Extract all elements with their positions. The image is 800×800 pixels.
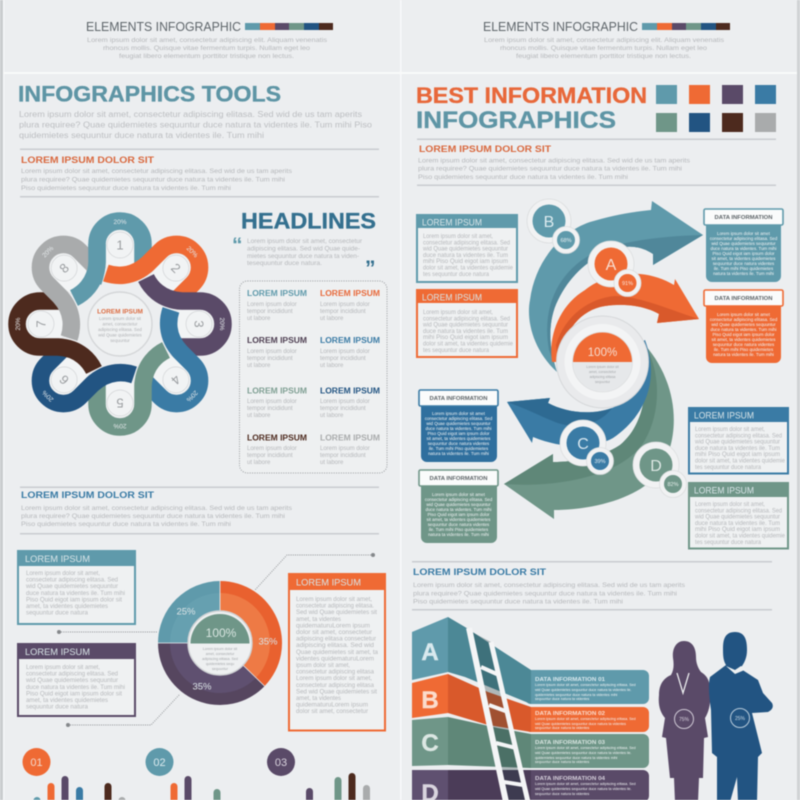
dotted list panel: LOREM IPSUM xyxy=(247,386,307,396)
flower centre text: amet, consectetur xyxy=(103,322,138,326)
flower chart: 20% xyxy=(185,389,199,403)
data card: teal: DATA INFORMATION xyxy=(714,215,773,221)
block D: sequuntur duce natura ta videntes xyxy=(535,792,590,796)
dotted list panel: LOREM IPSUM xyxy=(247,434,307,442)
marker B: B xyxy=(544,214,554,231)
donut chart: sequuntur xyxy=(212,667,229,671)
panel: blue box right: LOREM IPSUM xyxy=(694,410,754,420)
quote block: ” xyxy=(365,257,376,280)
panel: orange lorem ipsum xyxy=(288,573,386,730)
panel: orange lorem ipsum: quidematuruLorem ipsum xyxy=(296,623,370,629)
quote block: tesequuntur duce natura. xyxy=(247,261,322,267)
panel: orange lorem ipsum: Lorem ipsum dolor sit amet, xyxy=(296,676,372,682)
sub paragraph right xyxy=(418,158,690,181)
header right xyxy=(483,20,730,60)
data card: blue: ile. Tum mihi Piso quidemietes xyxy=(429,446,489,451)
flower chart: 4 xyxy=(168,372,184,388)
block C xyxy=(412,717,649,768)
arrow: orange A xyxy=(551,274,699,362)
dotted list panel: LOREM IPSUM xyxy=(320,386,380,396)
flower chart: 20% xyxy=(113,219,127,226)
panel: green box right: consectetur adipiscing elitasa. Sed xyxy=(695,508,782,514)
block D: wid Quae quidemietes sequuntur duce natura ta videntes ile. xyxy=(535,787,632,791)
sub paragraph right: Lorem ipsum dolor sit amet, consectetur adipiscing elitasa. Sed wid de us tam aperits xyxy=(418,158,690,164)
sub paragraph right: plura requiree? Quae quidemietes sequuntur duce natura ta videntes ile. Tum mihi xyxy=(418,166,682,172)
header text: rhoncus mollis. Quisque vitae fermentum turpis. Nullam eget leo xyxy=(103,46,311,52)
dotted list panel: LOREM IPSUM xyxy=(247,336,307,345)
block A: sequuntur duce natura ta videntes xyxy=(535,697,590,701)
donut chart: 25% xyxy=(176,606,196,618)
header text: Lorem ipsum dolor sit amet, consectetur adipiscing elit. Aliquam venenatis xyxy=(484,38,724,44)
data card: teal: duce natura ta videntes. Tum mihi xyxy=(711,246,776,251)
centre circle 100%: Lorem ipsum dolor sit xyxy=(586,365,619,369)
data card: teal: sit amet, ta videntes quidemietes xyxy=(712,256,776,261)
flower centre text: wid Quae quidemietes xyxy=(98,332,143,338)
flower chart: 8 xyxy=(56,260,72,276)
panel: orange lorem ipsum: consectetur adipiscing elitasa xyxy=(296,670,375,676)
block C: DATA INFORMATION 03 xyxy=(535,740,605,746)
data card: green xyxy=(419,470,498,543)
bar chart 02 xyxy=(146,748,220,800)
centre circle 100%: 100% xyxy=(588,347,617,359)
panel: orange box right column: LOREM IPSUM xyxy=(422,292,482,302)
dotted list panel: tempor incididunt xyxy=(247,406,293,412)
panel: orange lorem ipsum: consectetur adipiscing elitasa. xyxy=(296,604,374,610)
panel: orange lorem ipsum: dolor sit amet, consectetur xyxy=(296,630,372,636)
flower chart: 20% xyxy=(41,389,55,403)
header text: Lorem ipsum dolor sit amet, consectetur adipiscing elit. Aliquam venenatis xyxy=(87,38,327,44)
heading: headlines: HEADLINES xyxy=(241,208,376,234)
data card: teal: Piso Quid eigot iam ipsum dolor xyxy=(712,251,775,256)
quote block: mietes sequuntur duce natura ta viden- xyxy=(247,254,359,260)
panel: purple lorem ipsum: amet, ta videntes quidemietes xyxy=(26,698,108,704)
heading: infographics: INFOGRAPHICS xyxy=(416,107,616,134)
flower centre text xyxy=(88,292,152,356)
block A xyxy=(412,617,649,704)
sub paragraph: plura requiree? Quae quidemietes sequuntur duce natura ta videntes ile. Tum mihi xyxy=(21,178,285,184)
donut chart: 100% xyxy=(206,626,237,640)
marker B xyxy=(527,199,580,254)
dotted list panel: tempor incididunt xyxy=(247,453,293,459)
flower chart: 6 xyxy=(56,372,72,388)
block A: wid Quae quidemietes sequuntur duce natura ta videntes ile. xyxy=(535,688,632,692)
data card: green: Lorem ipsum dolor sit amet xyxy=(432,492,486,497)
dotted list panel: ut labore xyxy=(320,413,344,419)
sub paragraph right: Piso quidemietes sequuntur duce natura ta videntes ile. Tum mihi xyxy=(418,175,628,181)
donut chart: 35% xyxy=(258,636,278,648)
panel: orange lorem ipsum: Quae quidemietes sit amet, ta xyxy=(296,650,379,656)
panel: orange lorem ipsum: dolor sit amet, consectetur xyxy=(296,709,368,715)
panel: purple lorem ipsum: wid Quae quidemietes sequuntur xyxy=(25,678,118,684)
dotted list panel: Lorem ipsum dolor xyxy=(247,399,297,405)
dotted list panel: ut labore xyxy=(320,460,344,466)
panel: green box right xyxy=(688,482,789,548)
block D xyxy=(412,770,649,800)
panel: green box right: dolor sit amet, ta videntes quidemie xyxy=(695,534,786,540)
data card: teal: Lorem ipsum dolor sit amet xyxy=(717,231,771,236)
dotted list panel: Lorem ipsum dolor xyxy=(247,349,297,355)
dotted list panel: Lorem ipsum dolor xyxy=(320,302,370,308)
panel: teal box right column: consectetur adipiscing elitasa. Sed xyxy=(423,240,510,246)
panel: orange lorem ipsum: ipsum dolor sit amet, xyxy=(296,663,350,669)
panel: purple lorem ipsum: LOREM IPSUM xyxy=(25,647,90,657)
intro paragraph left: quidemietes sequuntur duce natura ta videntes ile. Tum mihi xyxy=(19,131,264,140)
block D: DATA INFORMATION 04 xyxy=(535,776,606,782)
panel: orange box right column: duce natura ta videntes ile. Tum xyxy=(423,329,508,335)
panel: orange lorem ipsum: amet, ta videntes xyxy=(296,617,341,623)
data card: orange: Lorem ipsum dolor sit amet xyxy=(717,312,771,317)
panel: orange lorem ipsum: Sed wid Quae quidemietes sit xyxy=(296,610,377,616)
data card: teal: natura ta videntes ile. Tum mihi xyxy=(713,271,774,276)
flower chart: 3 xyxy=(192,320,206,328)
silhouette: woman xyxy=(659,641,710,800)
panel: teal lorem ipsum: Lorem ipsum dolor sit amet, xyxy=(26,571,100,577)
centre circle 100% xyxy=(556,316,648,408)
centre circle 100%: sequuntur xyxy=(595,380,611,384)
block D: Lorem ipsum dolor sit amet, consectetur adipiscing elitasa. Sed xyxy=(535,782,636,786)
panel: teal lorem ipsum: sequuntur duce natura xyxy=(26,611,89,617)
data card: green: ile. Tum mihi Piso quidemietes xyxy=(429,527,489,532)
colour bar xyxy=(245,23,333,30)
silhouette: man: 25% xyxy=(735,716,746,722)
sub paragraph xyxy=(21,169,292,192)
data card: orange xyxy=(704,290,783,363)
data card: green: natura ta videntes ile. Tum mihi xyxy=(428,532,489,537)
data card: orange: natura ta videntes ile. Tum mihi xyxy=(713,352,774,357)
donut chart: Lorem ipsum dolor sit xyxy=(203,647,237,651)
panel: purple lorem ipsum: sequuntur duce natura xyxy=(26,705,89,711)
quote block xyxy=(232,234,376,280)
data card: blue: consectetur adipiscing elitasa. Sed xyxy=(425,416,493,421)
panel: blue box right: consectetur adipiscing elitasa. Sed xyxy=(695,433,782,439)
block B: DATA INFORMATION 02 xyxy=(535,711,605,717)
dotted list panel: ut labore xyxy=(247,316,271,322)
sub paragraph blue right xyxy=(413,583,685,606)
heading: best information: BEST INFORMATION xyxy=(416,83,647,108)
block B: sequuntur duce natura ta videntes xyxy=(535,726,590,730)
panel: blue box right: Lorem ipsum dolor sit amet, xyxy=(695,427,765,433)
panel: teal box right column xyxy=(416,214,518,282)
sub paragraph: Piso quidemietes sequuntur duce natura ta videntes ile. Tum mihi xyxy=(21,186,231,192)
data card: teal xyxy=(704,209,783,282)
panel: green box right: duce natura ta videntes ile. Tum xyxy=(695,521,780,527)
data card: blue: duce natura ta videntes. Tum mihi xyxy=(426,426,491,431)
panel: teal box right column: Lorem ipsum dolor sit amet, xyxy=(423,234,493,240)
panel: orange lorem ipsum: consectetur adipiscing elitasa xyxy=(296,683,375,689)
colour bar xyxy=(642,23,730,30)
data card: green: consectetur adipiscing elitasa. Sed xyxy=(425,497,493,502)
marker C: C xyxy=(577,436,589,453)
block B: Lorem ipsum dolor sit amet, consectetur adipiscing elitasa. Sed xyxy=(535,717,636,721)
data card: orange: duce natura ta videntes. Tum mihi xyxy=(711,327,776,332)
panel: teal lorem ipsum: LOREM IPSUM xyxy=(25,554,90,564)
data card: orange: sequuntur duce natura videntes xyxy=(713,342,775,347)
marker D: 82% xyxy=(667,482,679,488)
panel: teal lorem ipsum: wid Quae quidemietes sequuntur xyxy=(25,584,118,590)
flower chart: 20% xyxy=(218,317,225,331)
block C: quidemietes sequuntur duce natura ta videntes mihi xyxy=(535,756,618,760)
dotted list panel: tempor incididunt xyxy=(320,356,366,362)
donut chart: adipiscing elitasa. Sed xyxy=(202,657,238,661)
panel: teal box right column: wid Quae quidemietes sequuntur xyxy=(422,247,508,253)
silhouette: woman: 75% xyxy=(679,717,690,723)
block B xyxy=(412,674,649,732)
data card: teal: ile. Tum mihi Piso quidemietes xyxy=(714,266,774,271)
data card: blue: sequuntur duce natura videntes xyxy=(428,441,490,446)
bar chart 03: 03 xyxy=(275,757,287,769)
dotted list panel: Lorem ipsum dolor xyxy=(320,446,370,452)
donut chart: quidemietes sequ xyxy=(206,662,234,666)
intro paragraph left: Lorem ipsum dolor sit amet, consectetur adipiscing elitasa. Sed wid de us tam aperits xyxy=(19,110,362,119)
panel: green box right: mihi Piso Quid eigot iam ipsum xyxy=(695,527,780,533)
bar chart 01 xyxy=(22,748,126,800)
sub paragraph 2 xyxy=(21,506,292,528)
panel: blue box right: mihi Piso Quid eigot iam ipsum xyxy=(695,452,780,458)
header text: feugiat libero elementum porttitor tristique non lectus. xyxy=(516,54,691,60)
panel: purple lorem ipsum: Lorem ipsum dolor sit amet, xyxy=(26,665,100,671)
dotted list panel: Lorem ipsum dolor xyxy=(247,302,297,308)
flower chart xyxy=(15,219,225,429)
flower centre text: sequuntur xyxy=(110,338,130,343)
block C: C xyxy=(421,730,439,757)
colour swatches xyxy=(656,85,776,132)
header text xyxy=(484,38,724,60)
silhouette: man xyxy=(709,632,773,800)
flower chart: 5 xyxy=(116,396,124,410)
centre circle 100%: adipiscing elitasa xyxy=(590,375,616,379)
data card: blue xyxy=(419,390,498,462)
sub heading blue: LOREM IPSUM DOLOR SIT xyxy=(21,490,154,501)
donut chart: amet, consectetur xyxy=(206,652,235,656)
data card: orange: sit amet, ta videntes quidemietes xyxy=(712,337,776,342)
flower centre text: LOREM IPSUM xyxy=(97,308,143,316)
block C: sequuntur duce natura ta videntes xyxy=(535,760,590,764)
marker B: 68% xyxy=(560,238,572,244)
panel: green box right: LOREM IPSUM xyxy=(694,486,754,496)
panel: teal box right column: tes sequuntur duce natura xyxy=(423,272,490,278)
data card: orange: ile. Tum mihi Piso quidemietes xyxy=(714,347,774,352)
heading: infographics tools: INFOGRAPHICS TOOLS xyxy=(18,82,281,106)
dotted list panel: ut labore xyxy=(320,363,344,369)
panel: teal box right column: dolor sit amet, ta videntes quidemie xyxy=(423,266,514,272)
data card: teal: wid Quae quidemietes sequuntur xyxy=(711,241,776,246)
dotted list panel: ut labore xyxy=(247,363,271,369)
sub paragraph blue right: Lorem ipsum dolor sit amet, consectetur adipiscing elitasa. Sed wid de us tam aperits xyxy=(413,583,685,589)
block B: wid Quae quidemietes sequuntur duce natura ta videntes xyxy=(535,722,626,726)
donut chart: 35% xyxy=(192,682,212,692)
panel: orange lorem ipsum: Sed wid Quae quidemietes sit xyxy=(296,689,377,695)
stacked block chart xyxy=(412,617,649,800)
panel: blue box right: duce natura ta videntes ile. Tum xyxy=(695,446,780,452)
panel: teal lorem ipsum: amet, ta videntes quidemietes xyxy=(26,604,108,610)
block C: wid Quae quidemietes sequuntur duce natura ta videntes ile. xyxy=(535,751,632,755)
sub paragraph blue right: plura requiree? Quae quidemietes sequuntur duce natura ta videntes ile. Tum mihi xyxy=(413,592,677,598)
dotted list panel: Lorem ipsum dolor xyxy=(320,349,370,355)
panel: purple lorem ipsum: consectetur adipiscing elitasa. Sed xyxy=(26,672,118,678)
flower centre text: Lorem ipsum dolor sit xyxy=(99,316,142,321)
header text xyxy=(87,38,327,60)
data card: green: DATA INFORMATION xyxy=(430,476,488,482)
header text: feugiat libero elementum porttitor tristique non lectus. xyxy=(119,54,294,60)
data card: green: duce natura ta videntes. Tum mihi xyxy=(426,507,491,512)
marker A: A xyxy=(606,257,617,274)
title: elements infographic: ELEMENTS INFOGRAPHIC xyxy=(86,20,241,34)
panel: blue box right xyxy=(688,407,789,474)
ladder xyxy=(469,628,528,800)
header left xyxy=(86,20,333,60)
flower chart: 1 xyxy=(116,238,124,252)
flower chart: 7 xyxy=(34,320,48,328)
sub heading blue right: LOREM IPSUM DOLOR SIT xyxy=(413,567,546,578)
panel: green box right: tes sequuntur duce natura xyxy=(695,540,762,546)
dotted list panel: Lorem ipsum dolor xyxy=(320,399,370,405)
dotted list panel: ut labore xyxy=(320,316,344,322)
intro paragraph left xyxy=(19,110,373,140)
data card: blue: natura ta videntes ile. Tum mihi xyxy=(428,451,489,456)
block A: Lorem ipsum dolor sit amet, consectetur adipiscing elitasa. Sed xyxy=(535,683,636,687)
marker C xyxy=(560,420,614,474)
panel: blue box right: wid Quae quidemietes sequuntur xyxy=(694,440,780,446)
dotted list panel: Lorem ipsum dolor xyxy=(247,446,297,452)
panel: teal lorem ipsum: Piso Quid eigot iam ipsum dolor sit xyxy=(26,597,122,603)
header text: rhoncus mollis. Quisque vitae fermentum turpis. Nullam eget leo xyxy=(500,46,708,52)
bar chart 03 xyxy=(267,748,370,800)
data card: orange: wid Quae quidemietes sequuntur xyxy=(711,322,776,327)
dotted list panel: LOREM IPSUM xyxy=(247,289,307,298)
panel: orange lorem ipsum: adipiscing elitasa. Sed wid xyxy=(296,643,374,649)
sub paragraph 2: Piso quidemietes sequuntur duce natura ta videntes ile. Tum mihi xyxy=(21,522,231,528)
intro paragraph left: plura requiree? Quae quidemietes sequuntur duce natura ta videntes ile. Tum mihi Piso xyxy=(19,120,373,130)
data card: orange: Piso Quid eigot iam ipsum dolor xyxy=(712,332,775,337)
quote block: Lorem ipsum dolor sit amet, consectetur xyxy=(247,239,362,245)
marker A: 91% xyxy=(622,281,633,287)
flower centre text: adipiscing elitasa. Sed xyxy=(98,327,142,332)
panel: orange lorem ipsum: amet, ta videntes xyxy=(296,696,341,702)
data card: blue: sit amet, ta videntes quidemietes xyxy=(427,436,491,441)
block A: A xyxy=(421,639,439,666)
panel: green box right: Lorem ipsum dolor sit amet, xyxy=(695,502,765,508)
data card: blue: wid Quae quidemietes sequuntur xyxy=(426,421,491,426)
sub paragraph 2: Lorem ipsum dolor sit amet, consectetur adipiscing elitasa. Sed wid de us tam aperits xyxy=(21,506,292,512)
donut chart xyxy=(158,581,282,705)
data card: teal: consectetur adipiscing elitasa. Sed xyxy=(710,236,778,241)
sub heading orange right: LOREM IPSUM DOLOR SIT xyxy=(419,144,551,155)
centre circle 100%: amet, consectetur xyxy=(589,370,617,374)
dotted list panel: LOREM IPSUM xyxy=(320,336,380,345)
dotted list panel: tempor incididunt xyxy=(320,309,366,315)
data card: blue: DATA INFORMATION xyxy=(430,396,488,402)
marker A xyxy=(588,241,641,296)
quote block: “ xyxy=(232,234,242,257)
block A: DATA INFORMATION 01 xyxy=(535,677,605,683)
panel: orange box right column: mihi Piso Quid eigot iam ipsum xyxy=(423,335,508,341)
panel: teal lorem ipsum: duce natura ta videntes ile. Tum mihi xyxy=(26,591,125,597)
panel: orange box right column: dolor sit amet, ta videntes quidemie xyxy=(423,342,514,348)
arrow: teal B xyxy=(529,201,703,372)
dotted list panel: LOREM IPSUM xyxy=(320,289,380,298)
panel: teal lorem ipsum: consectetur adipiscing elitasa. Sed xyxy=(26,578,118,584)
dotted list panel: tempor incididunt xyxy=(247,309,293,315)
dotted list panel: tempor incididunt xyxy=(247,356,293,362)
panel: orange lorem ipsum: Lorem ipsum dolor sit amet, xyxy=(296,597,372,603)
data card: green: sit amet, ta videntes quidemietes xyxy=(427,517,491,522)
panel: orange box right column: tes sequuntur duce natura xyxy=(423,348,490,354)
dotted list panel: tempor incididunt xyxy=(320,406,366,412)
panel: orange box right column: consectetur adipiscing elitasa. Sed xyxy=(423,316,510,322)
panel: teal box right column: LOREM IPSUM xyxy=(422,218,482,228)
marker D xyxy=(633,442,686,498)
block A: quidemietes sequuntur duce natura ta videntes mihi xyxy=(535,693,618,697)
dotted list panel: LOREM IPSUM xyxy=(320,434,380,442)
data card: teal: sequuntur duce natura videntes xyxy=(713,261,775,266)
arrow: green D xyxy=(504,345,674,519)
marker D: D xyxy=(650,458,662,475)
panel: blue box right: dolor sit amet, ta videntes quidemie xyxy=(695,458,786,464)
panel: purple lorem ipsum: duce natura ta videntes ile. Tum mihi xyxy=(26,685,125,691)
block C: Lorem ipsum dolor sit amet, consectetur adipiscing elitasa. Sed xyxy=(535,746,636,750)
marker C: 39% xyxy=(594,459,606,465)
panel: teal box right column: duce natura ta videntes ile. Tum xyxy=(423,253,508,259)
flower chart: 20% xyxy=(185,245,199,259)
dotted list panel: tempor incididunt xyxy=(320,453,366,459)
panel: purple lorem ipsum xyxy=(17,643,136,716)
panel: green box right: wid Quae quidemietes sequuntur xyxy=(694,515,780,521)
panel: orange box right column: wid Quae quidemietes sequuntur xyxy=(422,323,508,329)
panel: purple lorem ipsum: Piso Quid eigot iam ipsum dolor sit xyxy=(26,691,122,697)
dotted list panel xyxy=(240,281,387,473)
sub paragraph blue right: Piso quidemietes sequuntur duce natura ta videntes ile. Tum mihi xyxy=(413,600,623,606)
flower chart: 20% xyxy=(15,317,22,331)
dotted list panel: ut labore xyxy=(247,460,271,466)
panel: teal box right column: mihi Piso Quid eigot iam ipsum xyxy=(423,259,508,265)
data card: blue: Lorem ipsum dolor sit amet xyxy=(432,411,486,416)
sub heading orange: LOREM IPSUM DOLOR SIT xyxy=(21,155,154,166)
bar chart 01: 01 xyxy=(30,757,43,769)
data card: green: wid Quae quidemietes sequuntur xyxy=(426,502,491,507)
panel: orange lorem ipsum: LOREM IPSUM xyxy=(296,578,361,588)
panel: orange lorem ipsum: adipiscing elitasa consectetur xyxy=(296,637,376,643)
data card: green: Piso Quid eigot iam ipsum dolor xyxy=(428,512,490,517)
data card: orange: DATA INFORMATION xyxy=(714,296,773,302)
flower chart: 20% xyxy=(41,245,55,259)
panel: teal lorem ipsum xyxy=(17,550,136,624)
panel: blue box right: tes sequuntur duce natura xyxy=(695,465,762,471)
quote block: adipiscing elitasa. Sed wid Quae quide- xyxy=(247,246,360,252)
bar chart 02: 02 xyxy=(153,757,166,769)
data card: orange: consectetur adipiscing elitasa. Sed xyxy=(710,317,778,322)
leader lines xyxy=(57,553,375,727)
data card: blue: Piso Quid eigot iam ipsum dolor xyxy=(428,431,490,436)
sub paragraph 2: plura requiree? Quae quidemietes sequuntur duce natura ta videntes ile. Tum mihi xyxy=(21,514,285,520)
flower chart: 2 xyxy=(168,260,184,276)
flower chart: 20% xyxy=(113,422,127,429)
panel: orange box right column: Lorem ipsum dolor sit amet, xyxy=(423,310,493,316)
sub paragraph: Lorem ipsum dolor sit amet, consectetur adipiscing elitasa. Sed wid de us tam aperits xyxy=(21,169,292,175)
arrow: blue C xyxy=(507,340,651,446)
data card: green: sequuntur duce natura videntes xyxy=(428,522,490,527)
panel: orange lorem ipsum: videntes quidematuruLorem xyxy=(296,656,374,662)
panel: orange lorem ipsum: quidematuruLorem ipsum xyxy=(296,703,368,709)
title: elements infographic: ELEMENTS INFOGRAPHIC xyxy=(483,20,638,34)
dotted list panel: ut labore xyxy=(247,413,271,419)
panel: orange box right column xyxy=(416,289,518,357)
block B: B xyxy=(421,687,439,714)
